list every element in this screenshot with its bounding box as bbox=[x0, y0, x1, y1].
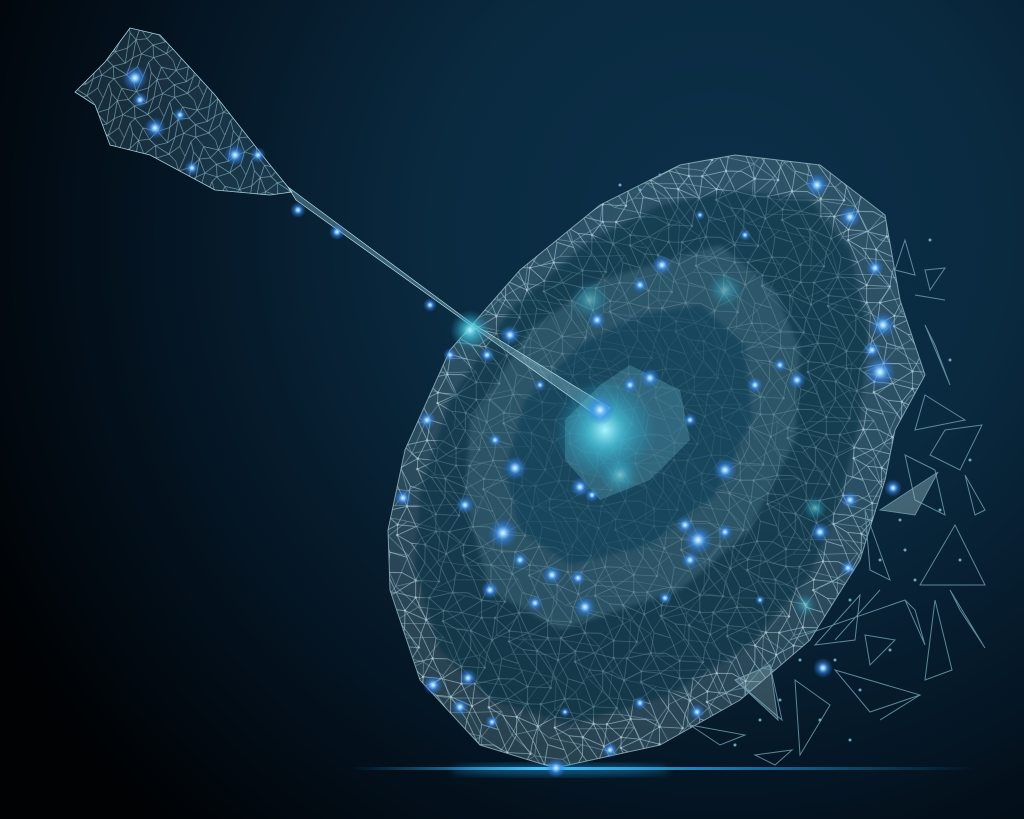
glow lights bbox=[122, 65, 902, 758]
target outline bbox=[388, 155, 925, 768]
arrow bbox=[70, 20, 610, 418]
blue light points bbox=[122, 65, 902, 758]
arrow shaft bbox=[288, 187, 610, 418]
debris shards bbox=[690, 240, 985, 765]
ground light bbox=[350, 758, 975, 778]
target board bbox=[370, 140, 940, 780]
arrow fletching bbox=[74, 28, 293, 196]
bullseye glow bbox=[553, 378, 657, 482]
target mesh bbox=[388, 156, 924, 766]
target inner dark ring bbox=[505, 305, 752, 565]
target outer ring bbox=[388, 155, 925, 768]
target bullseye bbox=[565, 365, 690, 500]
target dark ring bbox=[415, 190, 868, 725]
debris particles bbox=[618, 174, 972, 746]
target light ring bbox=[465, 245, 800, 630]
